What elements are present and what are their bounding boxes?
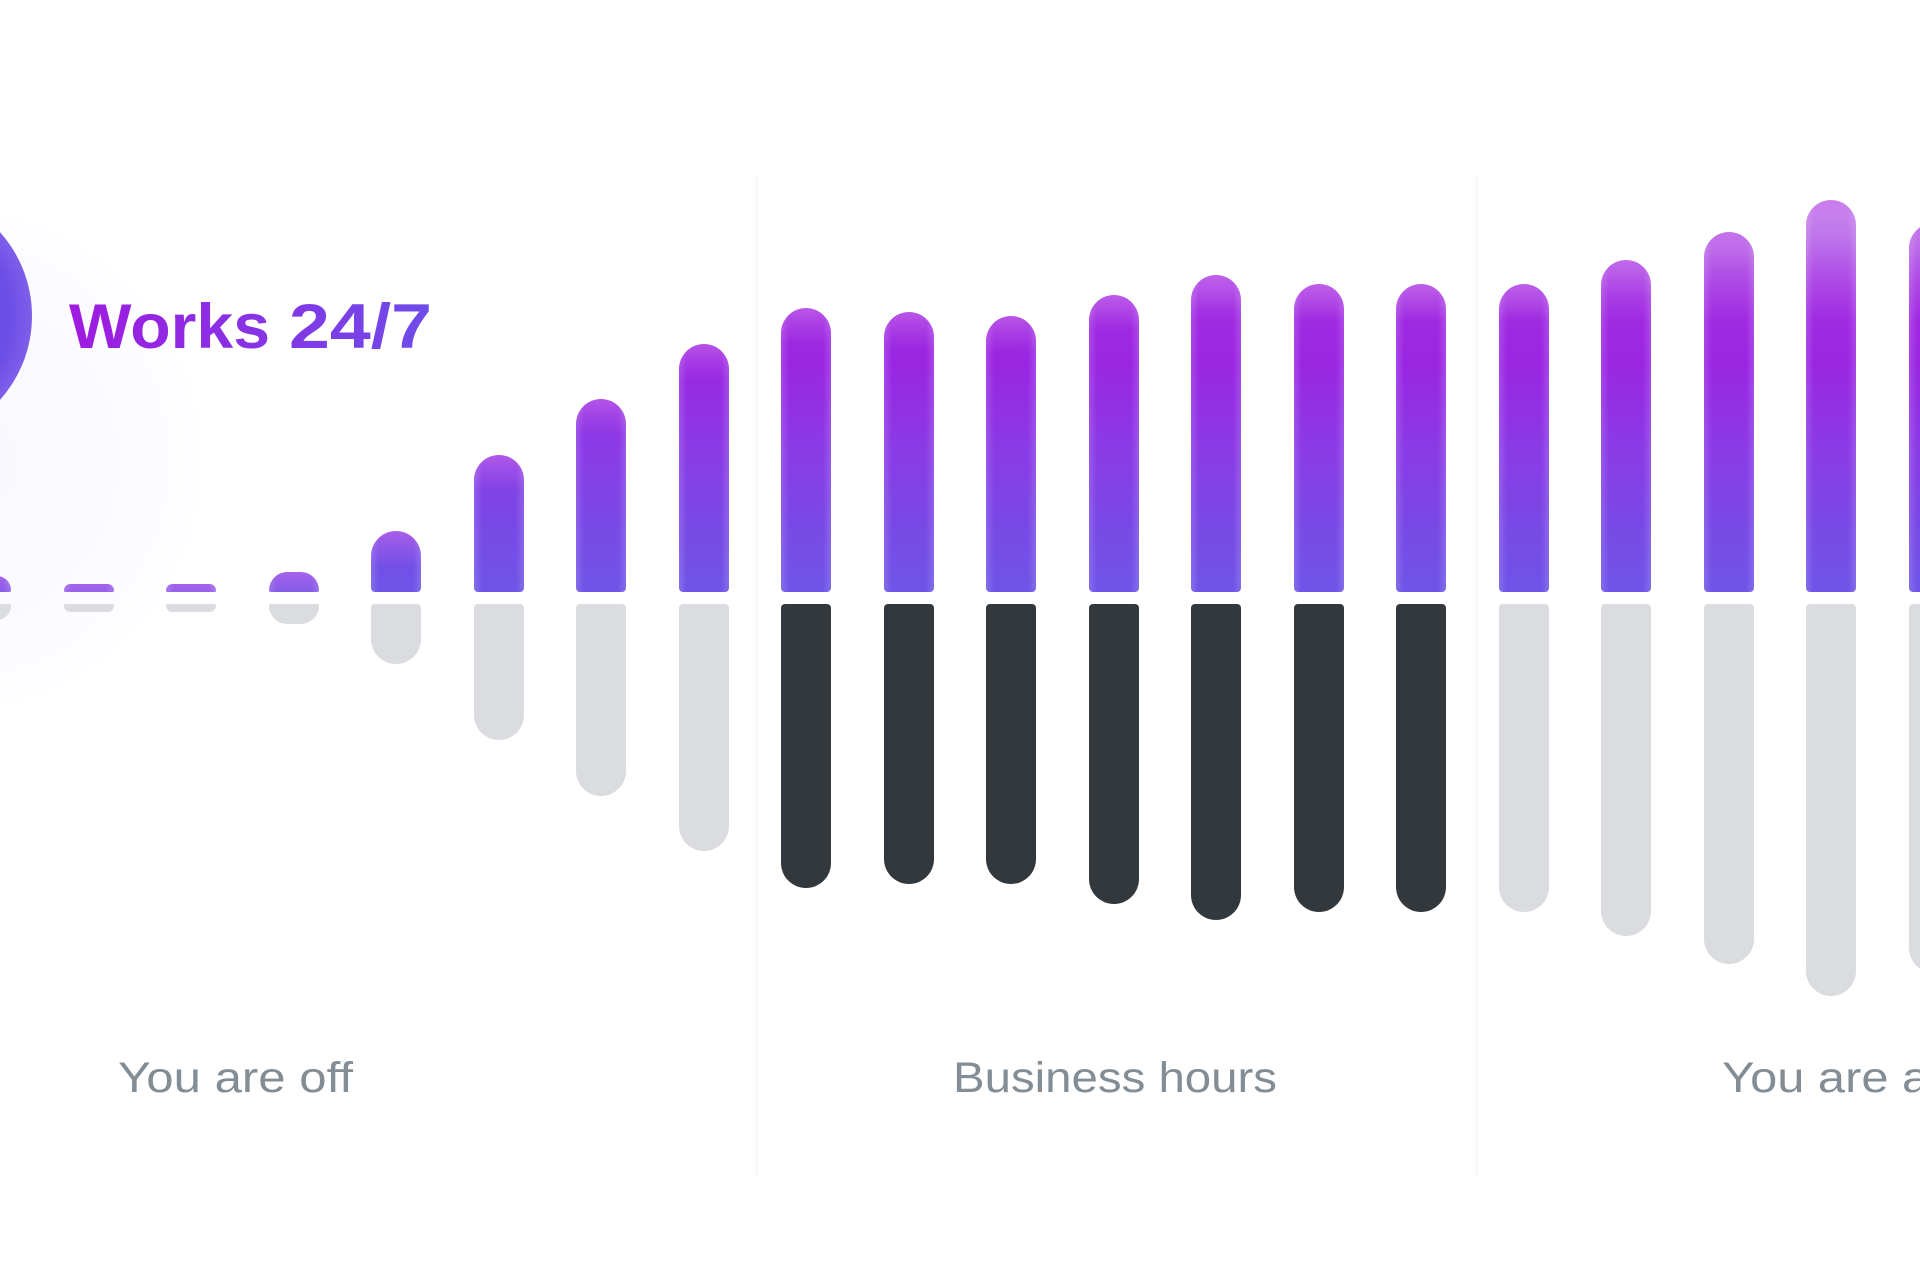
purple bar [1191, 275, 1241, 592]
purple bar [1909, 223, 1920, 592]
column 9 [781, 308, 831, 888]
purple bar [1396, 284, 1446, 592]
purple bar [371, 531, 421, 592]
purple bar [269, 572, 319, 592]
purple bar [474, 455, 524, 592]
purple bar [166, 584, 216, 592]
purple bar [1089, 295, 1139, 592]
column 12 [1089, 295, 1139, 904]
grey bar [679, 604, 729, 851]
column 16 [1499, 284, 1549, 912]
grey bar [269, 604, 319, 624]
grey bar [576, 604, 626, 796]
column 3 [166, 584, 216, 612]
purple bar [576, 399, 626, 592]
column 7 [576, 399, 626, 796]
column 6 [474, 455, 524, 740]
label: Business hours: Business hours [953, 1054, 1277, 1102]
dark bar [1191, 604, 1241, 920]
purple bar [1499, 284, 1549, 592]
title: Works 24/7: 24/7 [289, 292, 432, 362]
column 18 [1704, 232, 1754, 964]
column 11 [986, 316, 1036, 884]
column 15 [1396, 284, 1446, 912]
grey bar [474, 604, 524, 740]
label: You are off: You are off [118, 1054, 354, 1102]
dark bar [781, 604, 831, 888]
dark bar [1089, 604, 1139, 904]
dark bar [986, 604, 1036, 884]
purple bar [1294, 284, 1344, 592]
purple bar [1806, 200, 1856, 592]
grey bar [371, 604, 421, 664]
purple bar [781, 308, 831, 592]
icon: purple circle [0, 190, 32, 442]
dark bar [1294, 604, 1344, 912]
grey bar [166, 604, 216, 612]
column 1 [0, 576, 11, 620]
grey bar [1601, 604, 1651, 936]
grey bar [1909, 604, 1920, 973]
column 2 [64, 584, 114, 612]
title: Works 24/7 [69, 292, 432, 362]
soft glow behind circle [0, 210, 200, 710]
purple bar [64, 584, 114, 592]
column 19 [1806, 200, 1856, 996]
column 14 [1294, 284, 1344, 912]
purple bar [1601, 260, 1651, 592]
purple bar [986, 316, 1036, 592]
column 17 [1601, 260, 1651, 936]
grey bar [1704, 604, 1754, 964]
divider: business hours / away [1475, 175, 1478, 1176]
column 5 [371, 531, 421, 664]
grey bar [0, 604, 11, 620]
column 4 [269, 572, 319, 624]
grey bar [1806, 604, 1856, 996]
grey bar [64, 604, 114, 612]
column 8 [679, 344, 729, 851]
purple bar [884, 312, 934, 592]
purple bar [1704, 232, 1754, 592]
column 10 [884, 312, 934, 884]
column 20 [1909, 227, 1920, 968]
divider: off / business hours [755, 175, 758, 1176]
dark bar [1396, 604, 1446, 912]
column 13 [1191, 275, 1241, 920]
dark bar [884, 604, 934, 884]
purple bar [0, 576, 11, 592]
title: Works 24/7: Works [69, 292, 270, 362]
purple bar [679, 344, 729, 592]
grey bar [1499, 604, 1549, 912]
bar chart [0, 200, 1920, 996]
